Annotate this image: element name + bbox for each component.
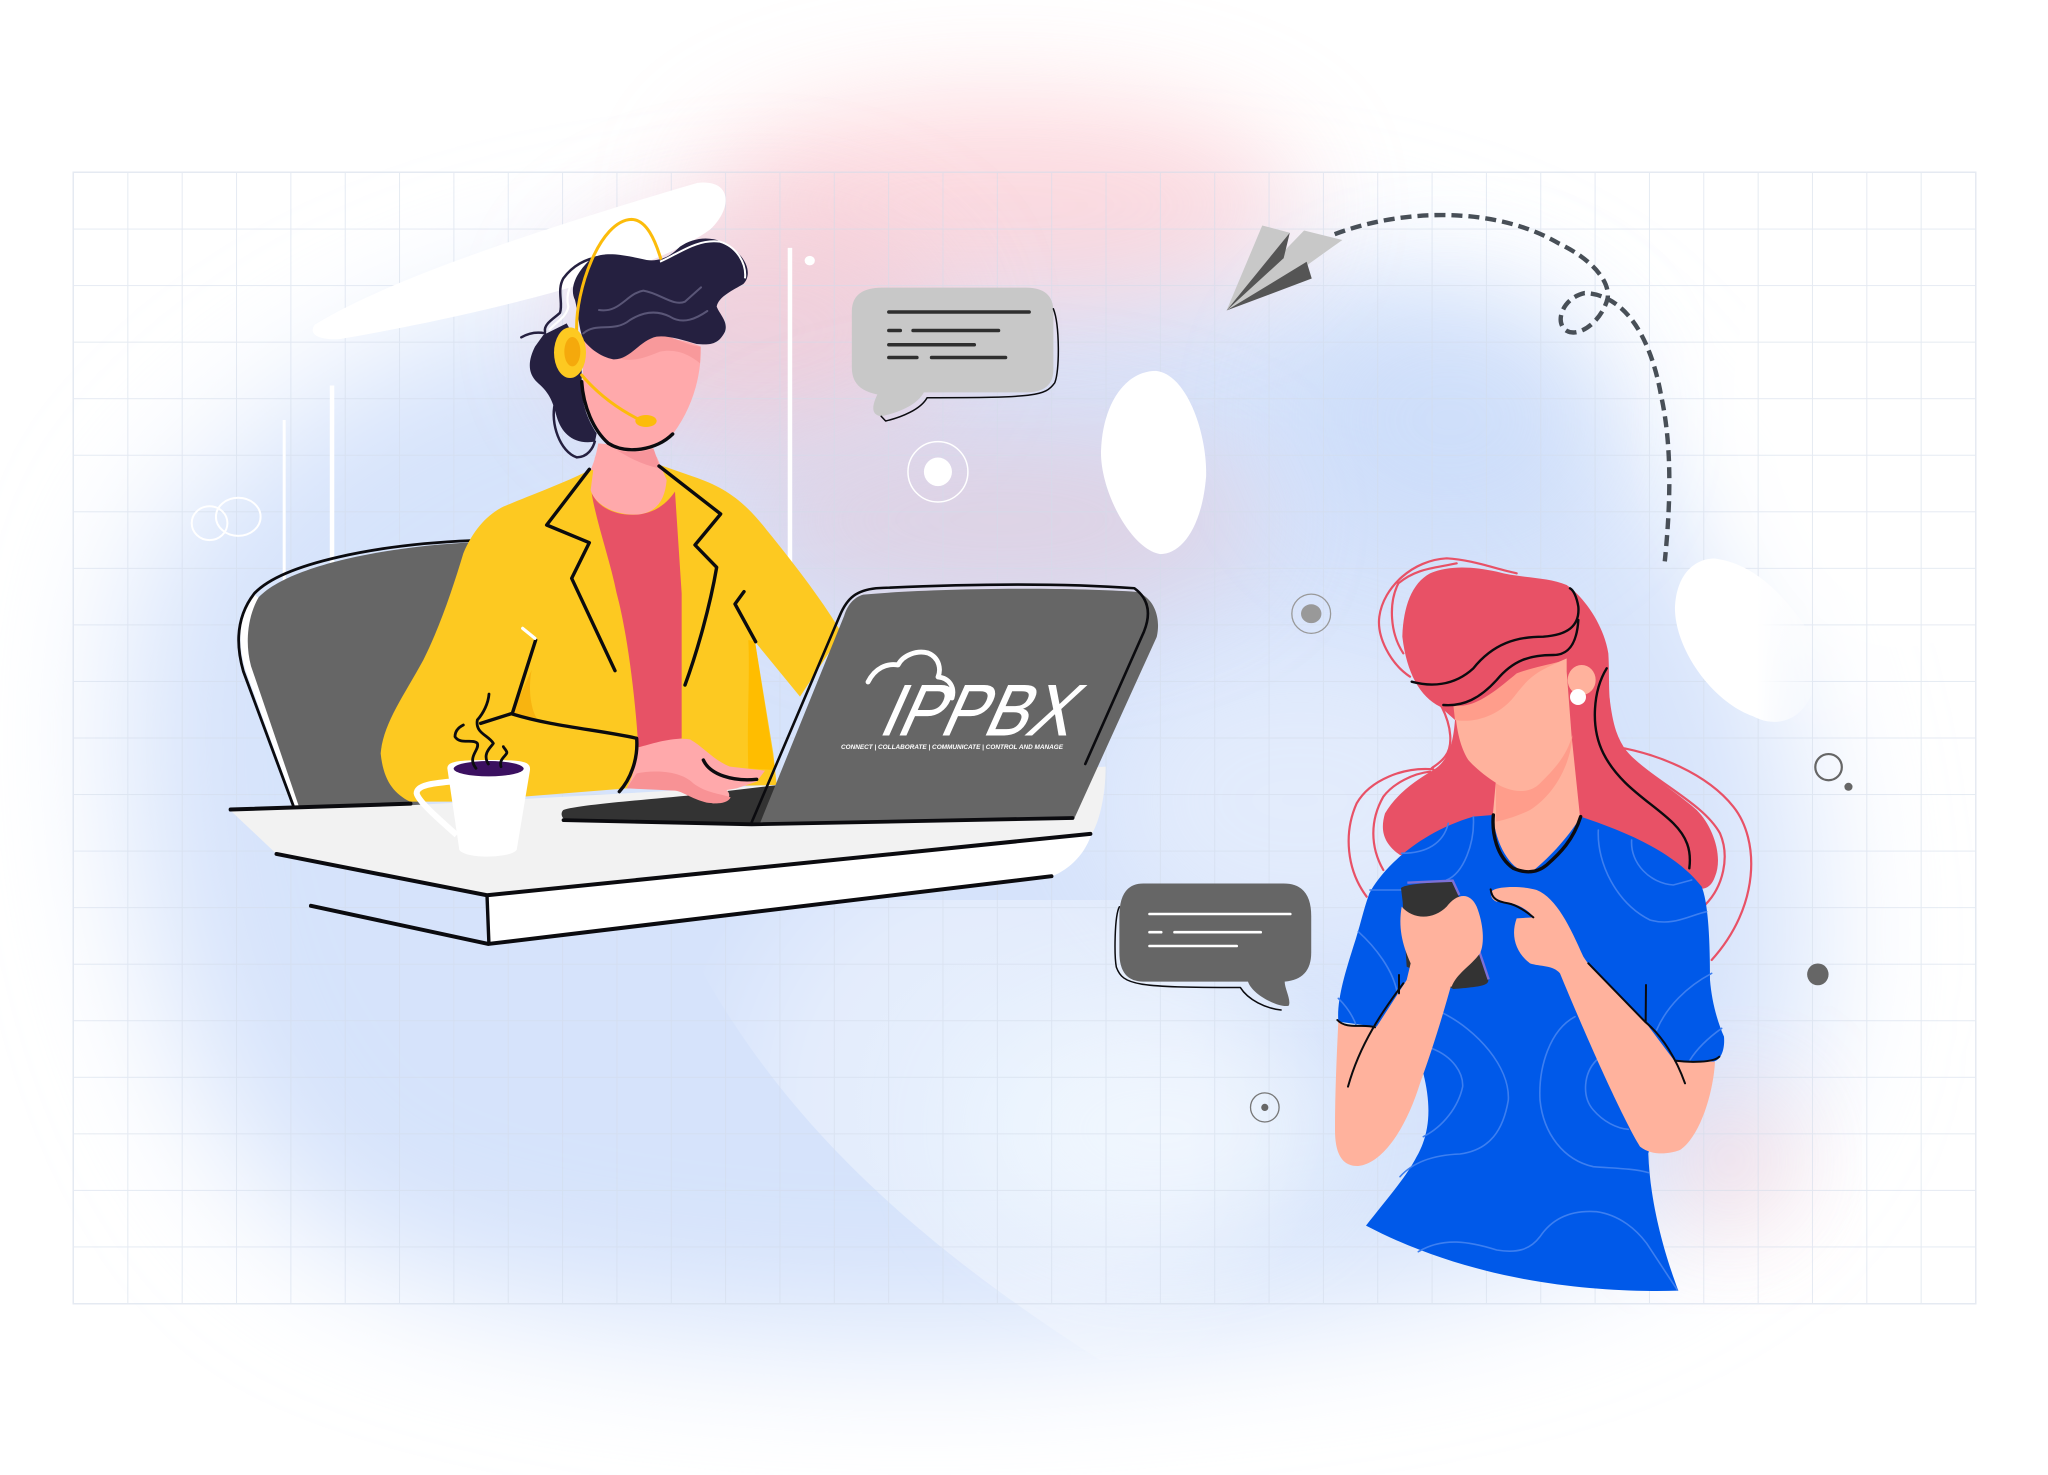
ring and dots at right [1807, 754, 1853, 985]
headset [554, 219, 661, 427]
hand [627, 739, 765, 803]
speech bubble: customer [1115, 883, 1311, 1010]
desk outlines [231, 804, 1090, 944]
neck [591, 457, 667, 515]
background colour wash [128, 95, 2048, 1344]
forehead shadow [1453, 662, 1560, 721]
desk front [487, 835, 1091, 944]
neck shadow [617, 448, 659, 468]
logo tagline: CONNECT | COLLABORATE | COMMUNICATE | CONTROL AND MANAGE [841, 745, 1064, 751]
jacket [381, 465, 842, 802]
face [583, 339, 701, 452]
white oval [1101, 371, 1206, 554]
man: laptop base, hand, mug and jacket lines [417, 466, 778, 857]
logo cloud [868, 652, 953, 698]
man: head [521, 219, 748, 473]
left hand [1400, 896, 1483, 987]
face [1455, 658, 1572, 793]
agent speech bubble and target [852, 288, 1058, 502]
dashed flight path [1335, 215, 1669, 561]
laptop screen [564, 585, 1158, 824]
white vertical accents [192, 248, 790, 584]
right arm and hand [1491, 887, 1715, 1153]
laptop base [562, 785, 778, 823]
man: backdrop shapes and chair [192, 182, 815, 806]
phone [1401, 881, 1489, 989]
chin line [582, 382, 673, 450]
coffee mug [417, 760, 530, 857]
forehead shadow [610, 335, 701, 363]
blue shirt [1338, 815, 1724, 1291]
target icon [908, 442, 968, 502]
hair outline black [1412, 588, 1690, 868]
desk top [231, 767, 1106, 896]
woman: hair, face and neck [1349, 558, 1751, 960]
man: jacket and torso [381, 457, 842, 802]
back hair [521, 257, 602, 457]
hair [1383, 567, 1718, 889]
logo wordmark: IPPBX [870, 670, 1096, 750]
chair [239, 541, 474, 806]
desk [231, 767, 1106, 944]
upper neck [591, 443, 661, 473]
jacket outlines [481, 466, 756, 792]
neck shadow [1496, 735, 1572, 822]
neckline [1493, 815, 1581, 872]
ring: grey target [1292, 594, 1331, 633]
sleeve shadow [512, 670, 537, 718]
paper plane [1227, 225, 1342, 311]
shirt [592, 492, 682, 747]
background grid [73, 172, 1976, 1304]
neck [1493, 737, 1581, 873]
white cuff accent [523, 628, 535, 638]
right-side decorative elements [1101, 215, 1853, 1122]
left arm [1335, 980, 1452, 1166]
jacket shadows [748, 640, 775, 770]
ring: small target [1251, 1093, 1279, 1122]
shirt pattern [1338, 817, 1722, 1290]
woman: shirt, arms and phone [1335, 815, 1724, 1291]
speech bubble: agent [852, 288, 1058, 421]
white right blob [1675, 558, 1812, 722]
IPPBX logo [841, 652, 1096, 751]
steam [455, 694, 507, 768]
light sweep behind desk [680, 900, 1520, 1360]
white dot [805, 256, 815, 265]
hair [573, 238, 748, 359]
hair outlines [1349, 558, 1751, 960]
clothing and arm outlines [1337, 889, 1719, 1087]
white blob behind head [313, 182, 726, 339]
ear and earring [1568, 665, 1596, 705]
